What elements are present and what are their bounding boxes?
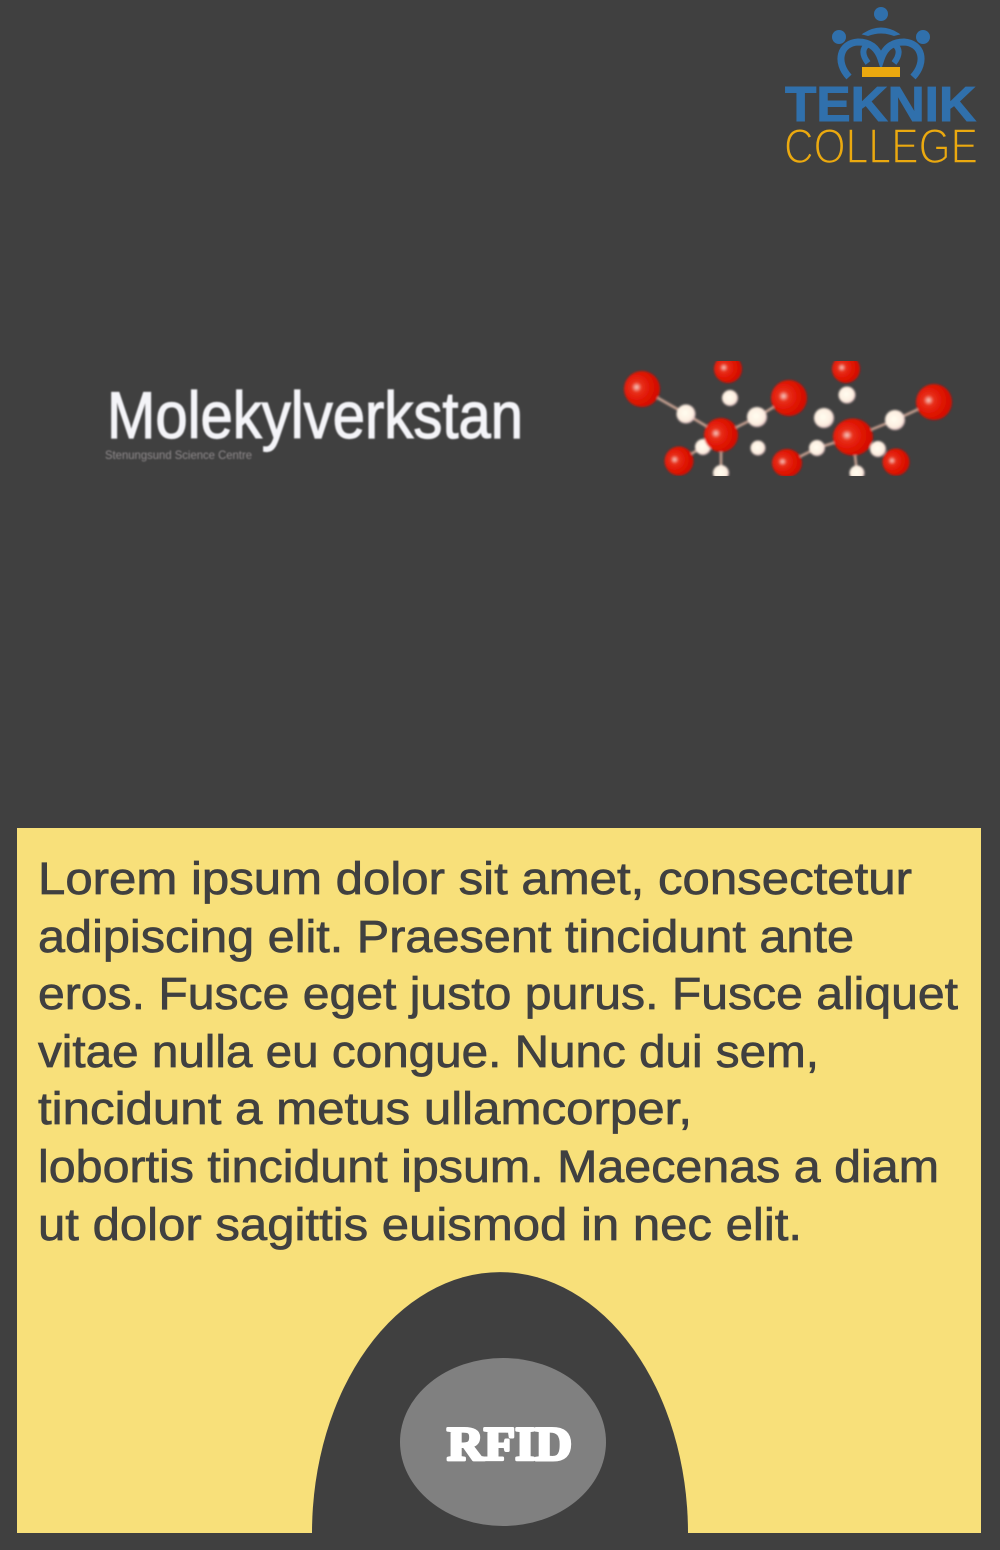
oxygen atoms xyxy=(624,355,952,477)
text block: lorem ipsum: ut dolor sagittis euismod in nec elit. xyxy=(38,1199,802,1250)
text block: lorem ipsum: tincidunt a metus ullamcorper, xyxy=(38,1083,692,1134)
arch cut-out xyxy=(312,1272,688,1533)
text block: lorem ipsum: Lorem ipsum dolor sit amet, consectetur xyxy=(38,853,912,904)
text block: lorem ipsum: adipiscing elit. Praesent tincidunt ante xyxy=(38,911,854,962)
bonds xyxy=(655,394,920,467)
wordmark: Molekylverkstan: Molekylverkstan xyxy=(107,378,523,452)
wordmark: TEKNIK: TEKNIK xyxy=(785,78,976,132)
text block: lorem ipsum: lobortis tincidunt ipsum. Maecenas a diam xyxy=(38,1141,939,1192)
text block: lorem ipsum: eros. Fusce eget justo purus. Fusce aliquet xyxy=(38,968,959,1019)
logo: Teknik College xyxy=(784,7,978,174)
text block: lorem ipsum xyxy=(38,853,959,1250)
RFID button xyxy=(400,1358,606,1526)
hydrogen atoms xyxy=(676,386,905,481)
tagline: Stenungsund Science Centre xyxy=(105,448,252,462)
icon: molecule xyxy=(624,355,952,481)
logo: Molekylverkstan xyxy=(105,378,523,462)
label: RFID: RFID xyxy=(447,1418,572,1471)
text block: lorem ipsum: vitae nulla eu congue. Nunc dui sem, xyxy=(38,1026,819,1077)
panel: yellow card xyxy=(17,828,981,1533)
icon: crown xyxy=(832,7,930,77)
